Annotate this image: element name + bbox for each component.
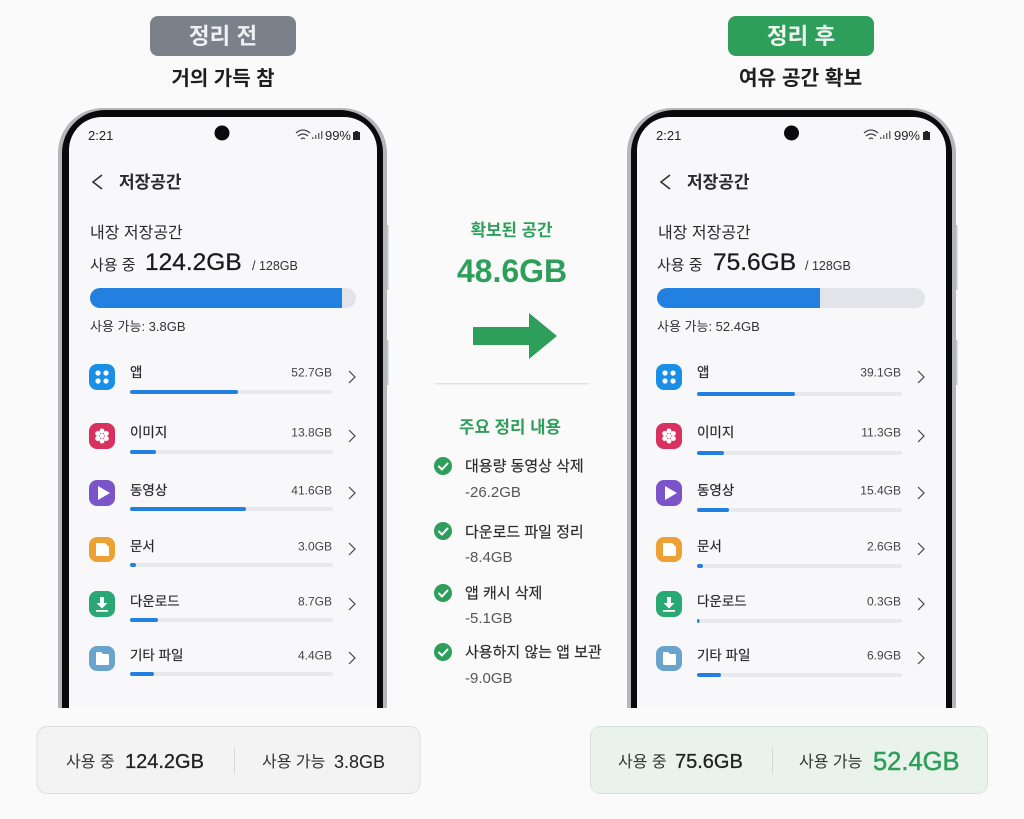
heading: 주요 정리 내용: 주요 정리 내용	[459, 418, 561, 437]
row: 다운로드: 0.3GB	[867, 594, 901, 608]
row: 동영상: 동영상	[697, 483, 734, 498]
row: 동영상: 41.6GB	[291, 484, 332, 498]
app bar: 저장공간: 저장공간	[119, 173, 182, 192]
item: 대용량 동영상 삭제: 대용량 동영상 삭제	[465, 458, 584, 475]
available text: 사용 가능: 3.8GB	[90, 319, 186, 334]
row: 기타 파일	[89, 646, 355, 676]
storage summary	[657, 224, 851, 276]
status bar: 2:21	[656, 128, 681, 143]
row: 문서: 3.0GB	[298, 540, 332, 554]
summary panel: after	[590, 726, 988, 794]
storage summary	[90, 224, 298, 276]
status bar: 99%	[894, 128, 920, 143]
item: 대용량 동영상 삭제	[434, 457, 584, 501]
heading: 여유 공간 확보: 여유 공간 확보	[739, 67, 862, 90]
badge: 정리 전	[150, 16, 296, 56]
badge: 정리 전: 정리 전	[189, 24, 257, 49]
row: 동영상	[89, 480, 355, 511]
summary panel: before: 124.2GB	[125, 751, 204, 773]
storage summary: 내장 저장공간	[90, 224, 183, 242]
storage summary: 사용 중	[657, 257, 703, 274]
item: 사용하지 않는 앱 보관: -9.0GB	[465, 670, 513, 687]
row: 앱: 앱	[697, 365, 709, 380]
row: 기타 파일	[656, 646, 924, 677]
row: 앱	[89, 364, 355, 394]
summary panel: before: 사용 가능	[262, 753, 325, 771]
row: 동영상: 동영상	[130, 483, 167, 498]
item: 사용하지 않는 앱 보관	[434, 643, 602, 687]
item: 앱 캐시 삭제: -5.1GB	[465, 610, 513, 627]
row: 기타 파일: 4.4GB	[298, 648, 332, 662]
badge: 정리 후	[728, 16, 874, 56]
panel: phone after	[627, 108, 958, 708]
row: 다운로드	[656, 591, 924, 623]
row: 문서: 2.6GB	[867, 540, 901, 554]
summary panel: after: 52.4GB	[873, 748, 959, 776]
row: 이미지: 이미지	[130, 425, 167, 440]
storage summary: 75.6GB	[713, 249, 796, 276]
row: 문서	[656, 537, 924, 568]
row: 앱: 52.7GB	[291, 366, 332, 380]
row: 이미지: 11.3GB	[861, 426, 901, 440]
row: 다운로드: 다운로드	[697, 594, 747, 609]
row: 다운로드	[89, 591, 355, 622]
item: 앱 캐시 삭제: 앱 캐시 삭제	[465, 585, 542, 602]
summary panel: after: 사용 중	[618, 753, 667, 771]
status bar: 99%	[325, 128, 351, 143]
status bar: 2:21	[88, 128, 113, 143]
row: 다운로드: 다운로드	[130, 594, 180, 609]
row: 앱: 앱	[130, 365, 142, 380]
available text: 사용 가능: 52.4GB	[657, 319, 760, 334]
storage summary: 124.2GB	[145, 249, 242, 276]
item: 다운로드 파일 정리: -8.4GB	[465, 549, 513, 566]
row: 동영상	[656, 480, 924, 512]
number: 48.6GB: 48.6GB	[457, 253, 567, 289]
row: 문서: 문서	[130, 539, 155, 554]
app bar: 저장공간: 저장공간	[687, 173, 750, 192]
item: 다운로드 파일 정리	[434, 522, 584, 566]
row: 이미지: 이미지	[697, 425, 734, 440]
row: 이미지: 13.8GB	[291, 426, 332, 440]
list: cleanup items	[434, 457, 602, 687]
status bar	[88, 126, 360, 143]
status bar	[656, 126, 930, 143]
summary panel: before	[37, 726, 420, 794]
arrow	[473, 313, 557, 359]
summary panel: after: 사용 가능	[799, 753, 862, 771]
storage bar	[90, 288, 356, 308]
storage bar	[657, 288, 925, 308]
row: 문서	[89, 537, 355, 567]
storage summary: 사용 중	[90, 257, 136, 274]
row: 기타 파일: 6.9GB	[867, 648, 901, 662]
summary panel: after: 75.6GB	[675, 751, 743, 773]
summary panel: before: 3.8GB	[334, 752, 385, 772]
item: 앱 캐시 삭제	[434, 584, 542, 627]
row: 앱: 39.1GB	[860, 366, 901, 380]
storage summary: 내장 저장공간	[658, 224, 751, 242]
badge: 정리 후: 정리 후	[767, 24, 835, 49]
row: 이미지	[89, 423, 355, 454]
row: 앱	[656, 364, 924, 396]
row: 문서: 문서	[697, 539, 722, 554]
row: 다운로드: 8.7GB	[298, 594, 332, 608]
heading: 거의 가득 참: 거의 가득 참	[171, 67, 275, 90]
row: 기타 파일: 기타 파일	[130, 648, 183, 663]
row: 기타 파일: 기타 파일	[697, 648, 750, 663]
row: 이미지	[656, 423, 924, 455]
label: 확보된 공간: 확보된 공간	[471, 221, 552, 240]
item: 사용하지 않는 앱 보관: 사용하지 않는 앱 보관	[465, 644, 602, 661]
summary panel: before: 사용 중	[66, 753, 115, 771]
storage summary: / 128GB	[252, 259, 298, 273]
panel: phone before	[58, 108, 388, 708]
item: 대용량 동영상 삭제: -26.2GB	[465, 484, 521, 501]
storage summary: / 128GB	[805, 259, 851, 273]
row: 동영상: 15.4GB	[860, 484, 901, 498]
item: 다운로드 파일 정리: 다운로드 파일 정리	[465, 524, 584, 541]
